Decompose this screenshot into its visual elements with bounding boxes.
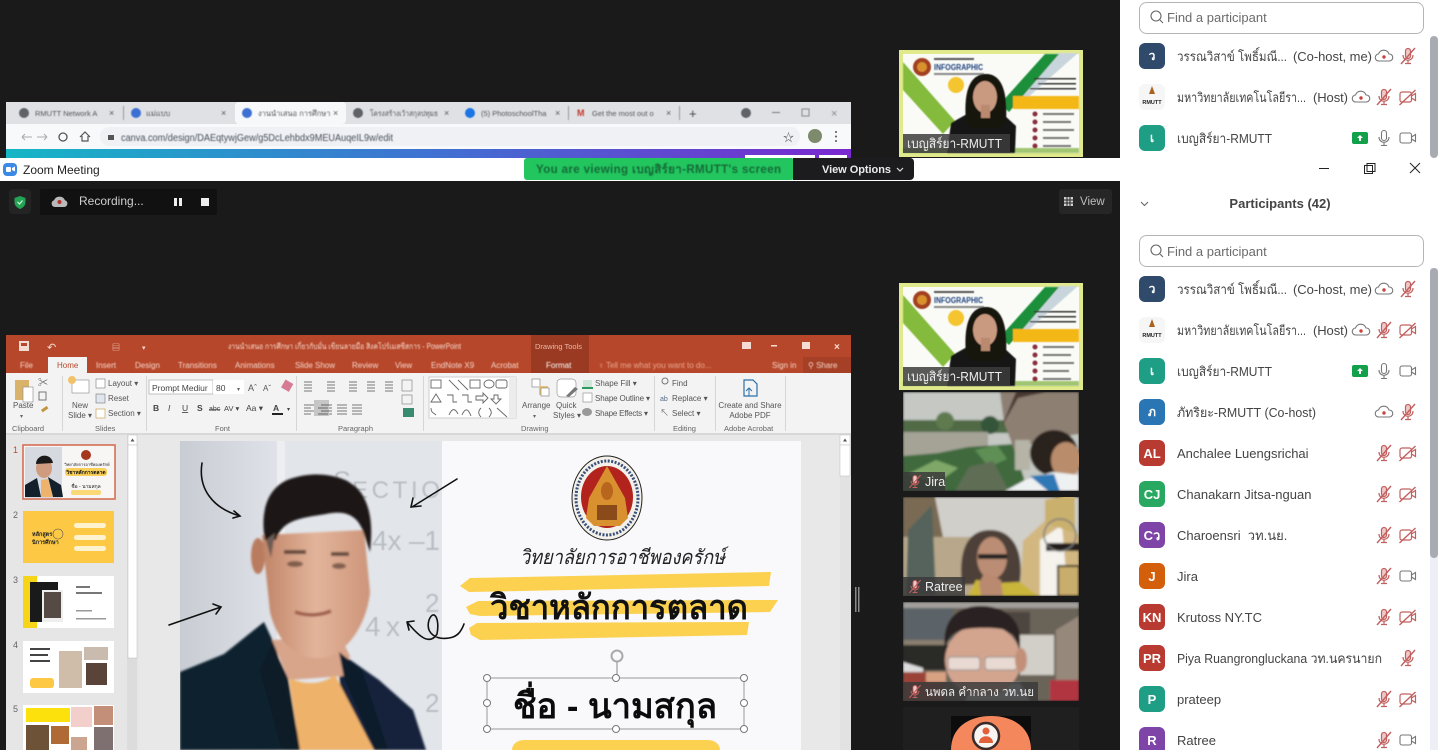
clipboard group: ✂ [38,378,48,389]
title bar and tab row: Sign in [772,361,796,370]
browser tabs: × [109,108,114,118]
title bar and tab row: Acrobat [491,361,519,370]
search box [1140,236,1424,266]
row: Piya: Piya Ruangrongluckana วท.นครนายก [1177,651,1382,666]
title bar and tab row: Review [352,361,378,370]
title bar and tab row: Insert [96,361,117,370]
browser tabs: Get the most out o [592,109,654,118]
recording status [40,189,217,215]
row: Charoensri [1139,522,1416,548]
title bar and tab row: File [20,361,33,370]
editing group: Select ▾ [672,409,700,418]
hand-drawn arrow crossing slide edge [169,604,221,625]
editing group: Editing [673,424,696,433]
row: Ratree: Ratree [1177,733,1216,748]
speaker name label: เบญสิร์ยา-RMUTT [907,136,1002,151]
browser tabs: งานนำเสนอ การศึกษา [258,109,330,118]
slide thumbnails pane: 1 [13,445,18,455]
photo of presenter: 2 [425,588,439,618]
slide thumbnails pane: 2 [13,510,18,520]
participant list [1139,276,1416,750]
title bar and tab row: ▤ [112,343,120,352]
thumbnail 2: นิการศึกษา [31,539,59,546]
font group: I [168,403,171,413]
hand-drawn arrows on slide [201,463,464,639]
name label [903,472,945,491]
row: ภัทริยะ [1139,399,1415,425]
row: Chanakarn [1139,481,1416,507]
editing group: ↖ [660,408,669,418]
font group [149,380,293,433]
slides group [68,376,141,433]
view button [1059,189,1112,214]
search box: Find a participant [1167,244,1267,259]
top participant rows: มหาวิทยาลัยเทคโนโลยีรา... [1177,90,1306,105]
row: Jira [1139,563,1416,589]
top participant rows: เ [1150,131,1154,145]
PowerPoint window [6,335,851,750]
thumbnail 5 [23,705,114,750]
browser tabs: แม่แบบ [146,109,170,118]
video tile: Ratree [903,493,1079,596]
editing group: Find [672,379,688,388]
slides group: Section ▾ [108,409,141,418]
slide thumbnails pane: 5 [13,704,18,714]
thumbnail 3 [23,576,114,628]
speaker name label: เบญสิร์ยา-RMUTT [907,369,1002,384]
course title: วิชาหลักการตลาด [489,589,748,627]
top participant rows [1139,43,1416,151]
row: Anchalee: AL [1143,446,1161,461]
title bar and tab row: × [834,342,840,353]
row: เบญสิร์ยา: เบญสิร์ยา-RMUTT [1177,364,1272,379]
top speaker video tile [899,50,1083,157]
thumbnail 1: วิชาหลักการตลาด [66,469,106,476]
speaker video tile: INFOGRAPHIC [934,296,983,305]
photo of presenter: 4x [365,611,400,642]
drawing group: Shape Outline ▾ [595,394,650,403]
selected text box [484,674,748,732]
title bar and tab row: Design [135,361,160,370]
panel window controls [1319,163,1420,174]
thumbnail 4 [23,641,114,693]
photo of presenter [180,441,442,750]
screen share banner: View Options [822,164,891,176]
browser tabs: RMUTT Network A [35,109,97,118]
row: prateep: P [1148,692,1157,707]
drawing group: Shape Fill ▾ [595,379,637,388]
list scrollbar [1430,268,1438,750]
name label [903,682,1038,701]
address bar [6,124,851,149]
slides group: New [72,401,88,410]
video tile: นพดล [903,602,1079,701]
thumbnail 2: หลักสูตร [32,531,52,539]
row: Krutoss: KN [1143,610,1161,625]
row: เบญสิร์ยา [1139,358,1416,384]
row: prateep: prateep [1177,692,1221,707]
row: Jira: J [1148,569,1156,584]
row: Krutoss: Krutoss NY.TC [1177,610,1262,625]
name label [903,577,965,596]
ribbon [6,373,851,435]
thumbnail 1 [23,445,115,499]
font group: Aa ▾ [246,403,264,413]
font group: B [153,403,159,413]
photo of presenter: 2 [425,688,439,718]
font group: U [182,403,188,413]
top participant rows: (Host) [1313,90,1348,105]
browser tabs: + [689,106,697,121]
row: วรรณวิสาข์ [1139,276,1415,302]
slide editing area [168,441,801,750]
name label: Ratree [925,580,963,594]
drawing group: Arrange [522,401,551,410]
screen share banner: You are viewing เบญสิร์ยา-RMUTT's screen [536,162,781,176]
top participant rows: (Co-host, me) [1293,49,1372,64]
browser tabs: × [666,108,671,118]
title bar and tab row: Animations [235,361,275,370]
font group: abc [209,406,221,413]
rotation handle [612,650,622,678]
selected text box: ชื่อ - นามสกุล [513,681,717,728]
slide thumbnails pane: 4 [13,640,18,650]
top participant rows: RMUTT [1142,100,1162,106]
drawing group: Shape Effects ▾ [595,409,648,418]
font group: Prompt Mediur [152,383,208,393]
name label: นพดล คำกลาง วท.นย [925,685,1034,699]
row: ภัทริยะ: ภ [1148,405,1156,419]
thumbnails scrollbar [127,435,137,750]
row: Piya [1139,645,1415,671]
thumbnail 1: วิทยาลัยการอาชีพองครักษ์ [64,462,110,467]
browser tabs [19,106,837,121]
editing group: Replace ▾ [672,394,708,403]
clipboard group: Clipboard [12,424,44,433]
title bar and tab row: ⚲ Share [808,361,838,370]
font group: 80 [216,383,226,393]
participants header [1141,196,1331,211]
row: Piya: PR [1143,651,1162,666]
font group: Aˇ [263,384,271,393]
row: host: มหาวิทยาลัยเทคโนโลยีรา... [1177,323,1306,338]
browser tabs: × [831,108,837,120]
browser tabs: × [333,108,338,118]
browser tabs: (5) PhotoschoolTha [481,109,547,118]
top search box [1140,2,1424,34]
title bar and tab row: ▾ [142,345,146,352]
zoom title bar [0,158,1120,181]
top speaker video tile: INFOGRAPHIC [934,63,983,72]
row: Ratree [1139,727,1416,750]
font group: ▾ [237,387,240,393]
split handle [855,587,860,612]
row: Anchalee: Anchalee Luengsrichai [1177,446,1309,461]
college name: วิทยาลัยการอาชีพองครักษ์ [520,546,729,569]
Adobe Acrobat group: Adobe Acrobat [724,424,774,433]
slides group: Layout ▾ [108,379,138,388]
row: prateep [1139,686,1416,712]
title bar and tab row: ↶ [47,342,56,354]
slides group: Slide ▾ [68,411,92,420]
clipboard group: ▾ [20,414,23,420]
view button: View [1080,196,1105,208]
font group: Font [215,424,231,433]
font group: AV ▾ [224,404,240,413]
clipboard group [12,378,48,433]
title bar and tab row: Home [57,361,79,370]
browser tabs: M [577,108,584,118]
editing group: ab [660,396,668,403]
font group: S [197,403,203,413]
row: Chanakarn: Chanakarn Jitsa-nguan [1177,487,1311,502]
drawing group [429,377,650,433]
recording status: Recording... [79,194,144,208]
row: ภัทริยะ: ภัทริยะ-RMUTT (Co-host) [1177,405,1316,420]
video tile: profile picture [903,707,1079,750]
browser tabs: × [444,108,449,118]
browser tabs: × [221,108,226,118]
row: host [1139,317,1416,343]
font group: ▾ [287,407,290,413]
security shield icon [9,189,31,214]
row: Anchalee [1139,440,1416,466]
Adobe Acrobat group: Adobe PDF [729,411,771,420]
thumbnail 1: ชื่อ - นามสกุล [71,483,101,490]
speaker video tile [899,283,1083,390]
shared browser window [6,102,851,158]
editing group [660,378,708,433]
row: host: RMUTT [1142,333,1162,339]
font group: Aˆ [248,383,257,393]
title bar and tab row: ♀ Tell me what you want to do... [598,361,711,370]
title bar and tab row: งานนำเสนอ การศึกษา เกี่ยวกับมั่น เขียนลายมือ สิงคโปร์เมสซีสการ - PowerPoint [228,341,462,351]
row: Krutoss [1139,604,1416,630]
row: Ratree: R [1147,733,1157,748]
row: Jira: Jira [1177,569,1199,584]
Adobe Acrobat group [718,380,782,433]
video tile: Jira [903,392,1081,491]
thumbnail 2 [23,511,114,563]
clipboard group: Paste [13,401,34,410]
font group: A [273,403,279,413]
row: host: (Host) [1313,323,1348,338]
slide thumbnails pane: 3 [13,575,18,585]
photo of presenter: ECTIO [352,477,440,504]
row: วรรณวิสาข์: วรรณวิสาข์ โพธิ์มณี... [1177,280,1287,297]
photo of presenter: 4x –1 [372,525,440,556]
college seal [572,456,642,540]
top participant rows: ว [1149,49,1156,63]
browser tabs: × [555,108,560,118]
title bar and tab row: EndNote X9 [431,361,475,370]
slide thumbnails pane [6,435,127,750]
address bar: canva.com/design/DAEqtywjGew/g5DcLehbdx9MEUAuqeIL9w/edit [121,133,393,144]
slides group: Slides [95,424,116,433]
drawing group: Quick [556,401,577,410]
top scrollbar [1430,36,1438,158]
row: เบญสิร์ยา: เ [1150,364,1154,378]
slide scrollbar [840,435,851,750]
top participant rows: เบญสิร์ยา-RMUTT [1177,131,1272,146]
browser tabs: โครงสร้างเว้าสกุลปทุมธ [370,109,438,118]
participants panel [1120,0,1440,750]
Adobe Acrobat group: Create and Share [718,401,782,410]
drawing group: ▾ [533,414,536,420]
paragraph group: Paragraph [338,424,373,433]
row: Charoensri: Cว [1144,528,1160,543]
top search box: Find a participant [1167,10,1267,25]
participants header: Participants (42) [1229,196,1331,211]
slide [180,441,801,750]
slides group: Reset [108,394,130,403]
title bar and tab row: Format [546,361,572,370]
photo of presenter: S [333,466,351,496]
yellow brush stroke [460,572,778,640]
title bar and tab row: Transitions [178,361,217,370]
zoom title bar: Zoom Meeting [23,163,100,177]
drawing group: Styles ▾ [553,411,581,420]
title bar and tab row: Slide Show [295,361,335,370]
top participant rows: วรรณวิสาข์ โพธิ์มณี... [1177,47,1287,64]
title bar and tab row: View [395,361,412,370]
yellow pill [512,740,720,750]
title bar and tab row: Drawing Tools [535,342,582,351]
row: Charoensri: Charoensri วท.นย. [1177,528,1287,543]
drawing group: Drawing [521,424,549,433]
row: วรรณวิสาข์: (Co-host, me) [1293,282,1372,297]
row: Chanakarn: CJ [1144,487,1160,502]
address bar: ☆ [783,131,794,144]
title bar and tab row [6,335,851,374]
paragraph group [304,380,414,433]
screen share banner [524,158,914,180]
row: วรรณวิสาข์: ว [1149,282,1156,296]
name label: Jira [925,475,945,489]
